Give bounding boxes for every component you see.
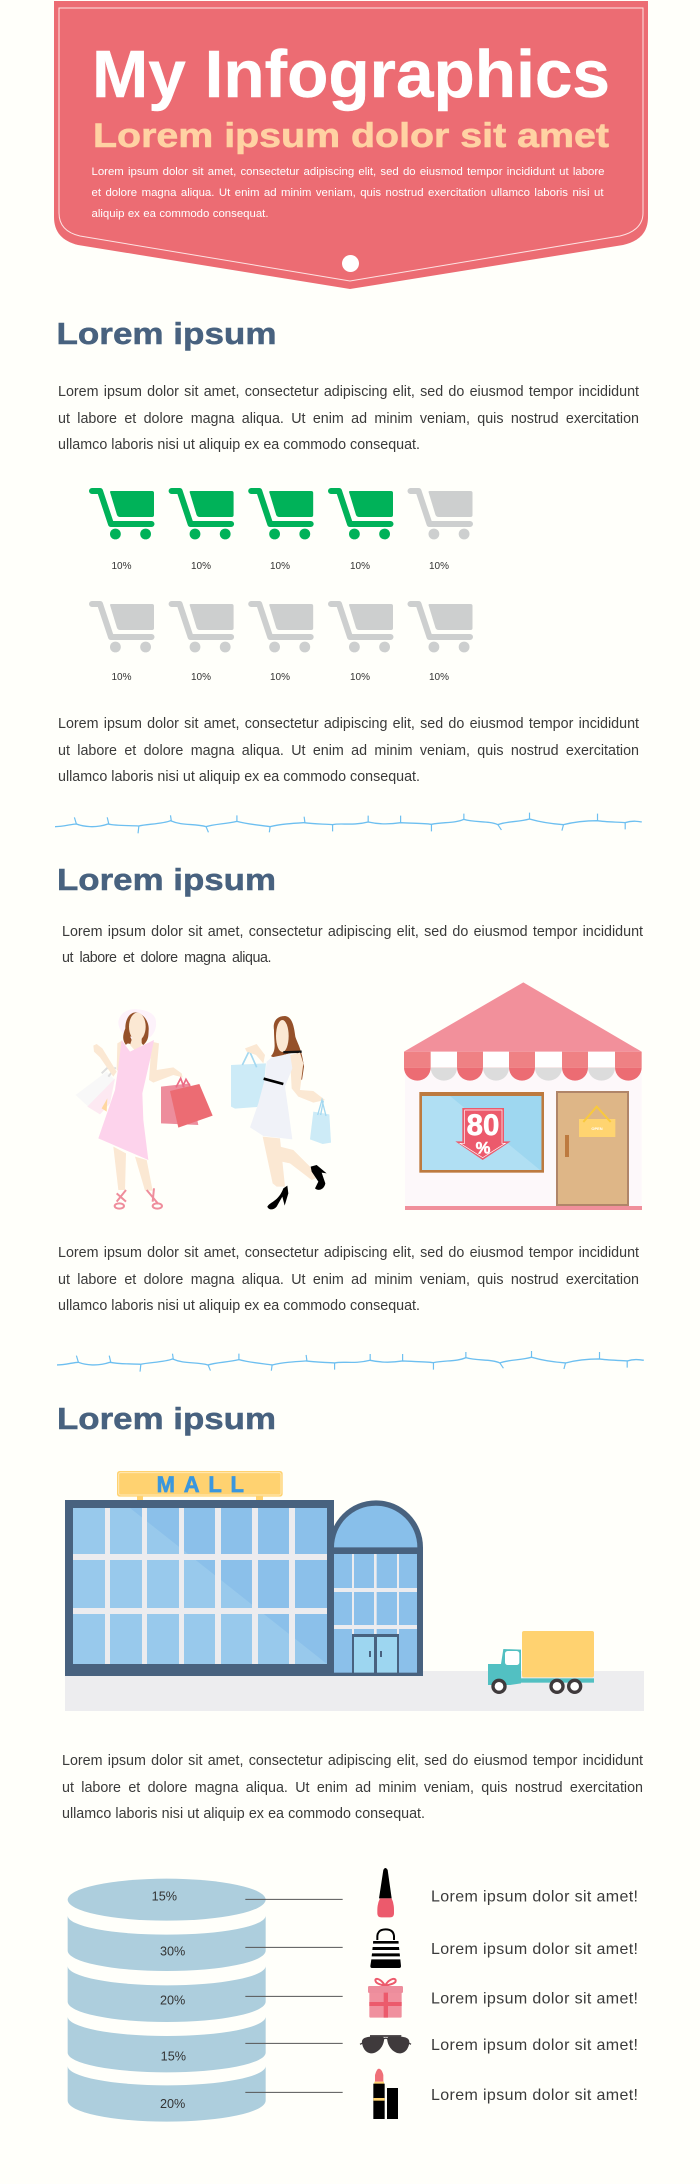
paragraph: section 2 intro: Lorem ipsum dolor sit amet, consectetur adipiscing elit, sed do eiusmod tempor incididunt [62,924,643,940]
window with sale tag [419,1092,544,1173]
segment 20% lower [68,2066,266,2122]
icon: striped handbag [370,1929,401,1968]
icon: nail polish [377,1868,394,1917]
icon: lipstick [373,2069,398,2119]
mall sign [117,1471,283,1501]
cart 7 grey [172,604,234,652]
percentage labels: 20% [160,2097,185,2111]
heading: section 2: Lorem ipsum [57,863,276,897]
legend text lines: Lorem ipsum dolor sit amet! [431,1991,638,2008]
cart percentage labels: 10% [270,561,290,572]
awning [404,1052,642,1081]
paragraph: section 3: ut labore et dolore magna aliqua. Ut enim ad minim veniam, quis nostrud exercitation [62,1780,643,1796]
cart 8 grey [251,604,313,652]
legend text lines: Lorem ipsum dolor sit amet! [431,1889,638,1906]
paragraph: section 1 outro: ullamco laboris nisi ut aliquip ex ea commodo consequat. [58,769,420,785]
legend text lines: Lorem ipsum dolor sit amet! [431,2087,638,2104]
icon: sunglasses [360,2036,411,2053]
percentage labels: 15% [161,2050,186,2064]
paragraph: section 2 intro [62,924,643,966]
percentage labels [152,1890,186,2111]
paragraph: section 1 intro [58,384,639,453]
cart percentage labels: 10% [191,561,211,572]
cart 5 grey [410,491,472,539]
segment 15% [68,1879,266,1921]
cart 6 grey [92,604,154,652]
cart percentage labels: 10% [350,561,370,572]
paragraph: section 1 intro: Lorem ipsum dolor sit amet, consectetur adipiscing elit, sed do eiusmod tempor incididunt [58,384,639,400]
cart percentage labels: 10% [350,672,370,683]
paragraph: section 1 outro: ut labore et dolore magna aliqua. Ut enim ad minim veniam, quis nostrud exercitation [58,743,639,759]
cart percentage labels: 10% [429,561,449,572]
percentage labels: 15% [152,1890,177,1904]
woman with pink dress [76,1009,213,1209]
window with sale tag: 80 [467,1109,499,1142]
cart 10 grey [410,604,472,652]
subtitle: Lorem ipsum dolor sit amet [93,117,609,155]
icon: gift box [368,1979,403,2018]
door with open sign: OPEN [591,1126,603,1131]
heading: section 1: Lorem ipsum [56,317,276,351]
mall sign: MALL [157,1472,244,1497]
paragraph: section 2 outro: ullamco laboris nisi ut aliquip ex ea commodo consequat. [58,1298,420,1314]
header paragraph: Lorem ipsum dolor sit amet, consectetur adipiscing elit, sed do eiusmod tempor incididunt ut labore [92,166,604,178]
main building [65,1500,334,1676]
legend text lines: Lorem ipsum dolor sit amet! [431,2037,638,2054]
percentage labels: 20% [160,1994,185,2008]
segment 20% [68,1966,266,2022]
title: My Infographics [92,37,610,112]
cart 4 filled [331,491,393,539]
stacked cylinder chart [68,1879,343,2122]
legend text lines [431,1889,638,2104]
product icons [360,1868,411,2119]
segment 30% [68,1916,266,1971]
leader lines [245,1899,343,2092]
woman with white dress [231,1016,331,1209]
header banner [54,1,648,289]
cart percentage labels: 10% [111,561,132,572]
door with open sign [557,1092,628,1205]
paragraph: section 2 outro: Lorem ipsum dolor sit amet, consectetur adipiscing elit, sed do eiusmod tempor incididunt [58,1245,639,1261]
paragraph: section 1 intro: ut labore et dolore magna aliqua. Ut enim ad minim veniam, quis nostrud exercitation [58,411,639,427]
cart percentage labels: 10% [111,672,132,683]
segment 15% lower [68,2017,266,2072]
illustration: shopping women [76,1009,331,1209]
cart 2 filled [172,491,234,539]
cart chart: 10 carts, 4 filled [92,491,472,683]
cart percentage labels: 10% [429,672,449,683]
paragraph: section 3: ullamco laboris nisi ut aliquip ex ea commodo consequat. [62,1806,425,1822]
legend text lines: Lorem ipsum dolor sit amet! [431,1941,638,1958]
paragraph: section 2 outro: ut labore et dolore magna aliqua. Ut enim ad minim veniam, quis nostrud exercitation [58,1272,639,1288]
illustration: mall building [65,1471,423,1676]
paragraph: section 3: Lorem ipsum dolor sit amet, consectetur adipiscing elit, sed do eiusmod tempor incididunt [62,1753,643,1769]
header paragraph: aliquip ex ea commodo consequat. [92,208,268,220]
paragraph: section 3 [62,1753,643,1822]
header paragraph: et dolore magna aliqua. Ut enim ad minim veniam, quis nostrud exercitation ullamco laboris nisi ut [92,187,604,199]
cart percentage labels: 10% [270,672,290,683]
illustration: delivery truck [488,1631,594,1692]
cart percentage labels: 10% [191,672,211,683]
header paragraph [92,166,604,220]
cart 3 filled [251,491,313,539]
heading: section 3: Lorem ipsum [57,1402,276,1436]
paragraph: section 1 outro [58,716,639,785]
paragraph: section 2 intro: ut labore et dolore magna aliqua. [62,950,271,966]
cart percentage labels [111,561,449,683]
ground strip [65,1671,644,1711]
cart 9 grey [331,604,393,652]
window with sale tag: % [476,1138,491,1157]
cart 1 filled [92,491,154,539]
divider 1 [55,813,642,833]
divider 2 [57,1351,644,1372]
illustration: storefront [404,982,642,1210]
paragraph: section 1 outro: Lorem ipsum dolor sit amet, consectetur adipiscing elit, sed do eiusmod tempor incididunt [58,716,639,732]
percentage labels: 30% [160,1945,185,1959]
shop wall [405,1068,642,1207]
paragraph: section 1 intro: ullamco laboris nisi ut aliquip ex ea commodo consequat. [58,437,420,453]
floor strip [405,1206,642,1210]
paragraph: section 2 outro [58,1245,639,1314]
roof [404,982,642,1052]
arched entrance tower [329,1500,423,1676]
